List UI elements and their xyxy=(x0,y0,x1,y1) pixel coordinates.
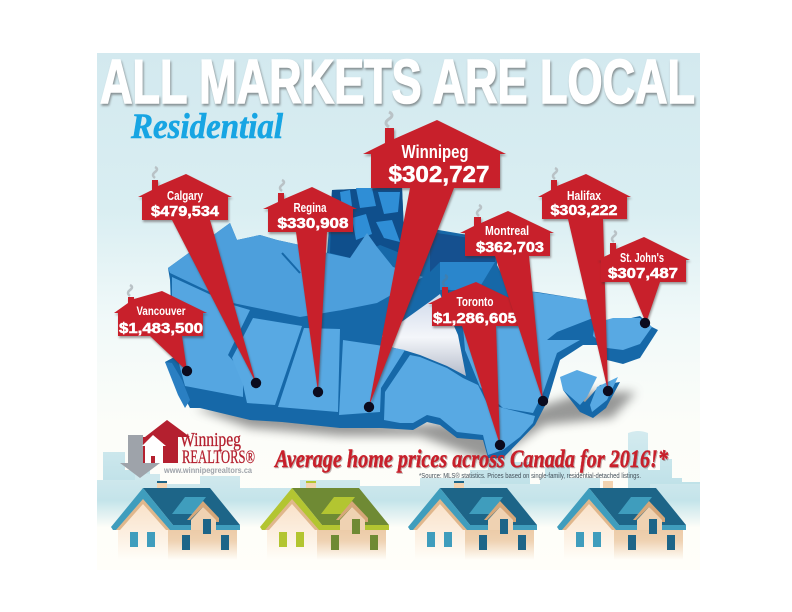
Newfoundland xyxy=(593,318,652,350)
label: Calgary xyxy=(138,167,261,388)
Quebec north xyxy=(430,232,497,290)
map shadow xyxy=(195,392,636,462)
label: Winnipeg: $302,727 xyxy=(388,161,490,187)
background panel xyxy=(97,53,700,570)
map extruded base xyxy=(165,187,658,458)
label: Toronto xyxy=(428,275,522,450)
label: Montreal: Montreal xyxy=(485,223,529,238)
logo: Winnipeg Realtors: REALTORS® xyxy=(182,447,255,468)
label: Winnipeg: Winnipeg xyxy=(402,142,468,162)
Hudson Bay xyxy=(382,294,466,376)
Maritimes xyxy=(560,370,620,418)
Alberta xyxy=(232,318,302,405)
label: Vancouver xyxy=(114,285,207,376)
label: Vancouver: $1,483,500 xyxy=(119,320,203,337)
house 2 green xyxy=(260,481,389,560)
label: St. John's: $307,487 xyxy=(608,265,678,282)
city skyline xyxy=(97,430,700,528)
house 1 blue xyxy=(111,481,240,560)
logo url: www.winnipegrealtors.ca xyxy=(163,465,252,475)
Quebec and Labrador xyxy=(463,292,593,413)
label: St. John's xyxy=(597,231,690,328)
label: Winnipeg xyxy=(363,112,506,412)
label: Halifax xyxy=(538,168,631,396)
source footnote: *Source: MLS® statistics. Prices based on single-family, residential-detached listings. xyxy=(419,472,641,480)
house 4 blue xyxy=(557,481,686,560)
subtitle: Residential: Residential xyxy=(130,106,283,146)
Saskatchewan xyxy=(278,328,340,412)
label: Halifax: $303,222 xyxy=(550,202,618,219)
north territories xyxy=(168,223,430,317)
logo: Winnipeg Realtors xyxy=(120,420,255,478)
logo wordmark: Winnipeg xyxy=(180,429,241,451)
map of Canada xyxy=(165,187,658,462)
label: Halifax: Halifax xyxy=(567,188,602,203)
tagline: Average home prices across Canada for 2016!* xyxy=(273,446,668,473)
British Columbia xyxy=(165,277,250,408)
label: Vancouver: Vancouver xyxy=(136,304,186,318)
label: Regina: $330,908 xyxy=(278,215,348,232)
label: Montreal: $362,703 xyxy=(476,239,544,256)
label: Calgary: Calgary xyxy=(167,188,204,203)
label: Montreal xyxy=(460,205,554,406)
label: Regina: Regina xyxy=(294,200,327,215)
label: St. John's: St. John's xyxy=(620,250,664,265)
Manitoba xyxy=(339,340,405,415)
arctic islands xyxy=(330,187,405,258)
Ontario xyxy=(384,355,535,455)
label: Calgary: $479,534 xyxy=(151,203,220,220)
label: Toronto: Toronto xyxy=(456,294,494,309)
icon: house and arrow xyxy=(120,420,190,478)
label: Regina xyxy=(263,180,357,397)
house 3 blue xyxy=(408,481,537,560)
label: Toronto: $1,286,605 xyxy=(433,310,517,327)
